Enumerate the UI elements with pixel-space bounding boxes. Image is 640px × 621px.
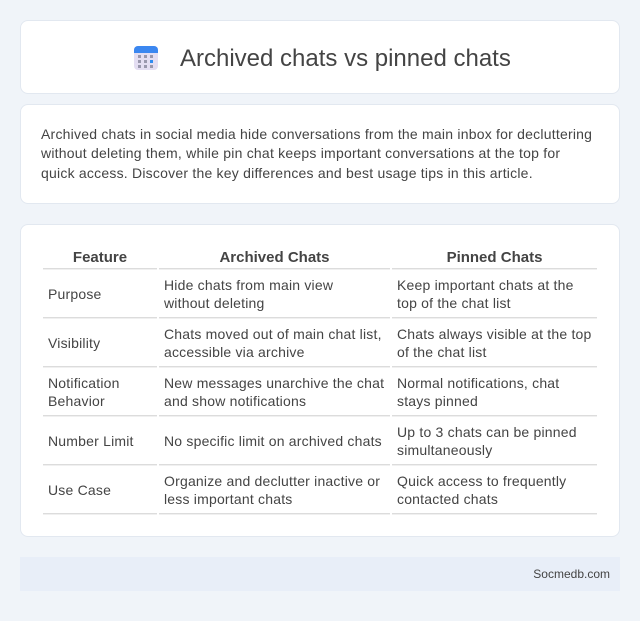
intro text (41, 126, 592, 181)
table rows: and show notifications (164, 393, 306, 409)
table rows: Chats moved out of main chat list, (164, 326, 382, 342)
table header: Pinned Chats (447, 249, 542, 266)
panel: introduction (20, 104, 620, 204)
table rows: stays pinned (397, 393, 478, 409)
table rows: top of the chat list (397, 295, 511, 311)
intro text: without deleting them, while pin chat keeps important conversations at the top for (41, 145, 560, 161)
table rows: Behavior (48, 393, 105, 409)
table header: Feature (73, 249, 127, 266)
table rows: Quick access to frequently (397, 473, 566, 489)
table rows: Normal notifications, chat (397, 375, 559, 391)
table rows: Keep important chats at the (397, 277, 574, 293)
table rows: Use Case (48, 482, 111, 498)
table rows: simultaneously (397, 442, 492, 458)
table rows: New messages unarchive the chat (164, 375, 384, 391)
table rows: of the chat list (397, 344, 487, 360)
table rows: Organize and declutter inactive or (164, 473, 380, 489)
table header (73, 249, 542, 266)
table rows: without deleting (164, 295, 264, 311)
footer brand text: Socmedb.com (533, 567, 610, 581)
table rows: Number Limit (48, 433, 134, 449)
icon: calendar app (134, 46, 158, 70)
table rows: Visibility (48, 335, 100, 351)
title: Archived chats vs pinned chats (180, 45, 511, 72)
panel: title card (20, 20, 620, 94)
table rows: Notification (48, 375, 120, 391)
footer bar (20, 557, 620, 591)
table rows: Chats always visible at the top (397, 326, 592, 342)
table rows: Up to 3 chats can be pinned (397, 424, 577, 440)
table rows: Purpose (48, 286, 102, 302)
table rows: contacted chats (397, 491, 498, 507)
intro text: Archived chats in social media hide conversations from the main inbox for decluttering (41, 126, 592, 142)
table rows: No specific limit on archived chats (164, 433, 382, 449)
table rows: less important chats (164, 491, 292, 507)
intro text: quick access. Discover the key differences and best usage tips in this article. (41, 165, 533, 181)
panel: comparison table (20, 224, 620, 537)
table rows: accessible via archive (164, 344, 305, 360)
table header: Archived Chats (219, 249, 330, 266)
table rows (43, 268, 597, 515)
table rows: Hide chats from main view (164, 277, 333, 293)
